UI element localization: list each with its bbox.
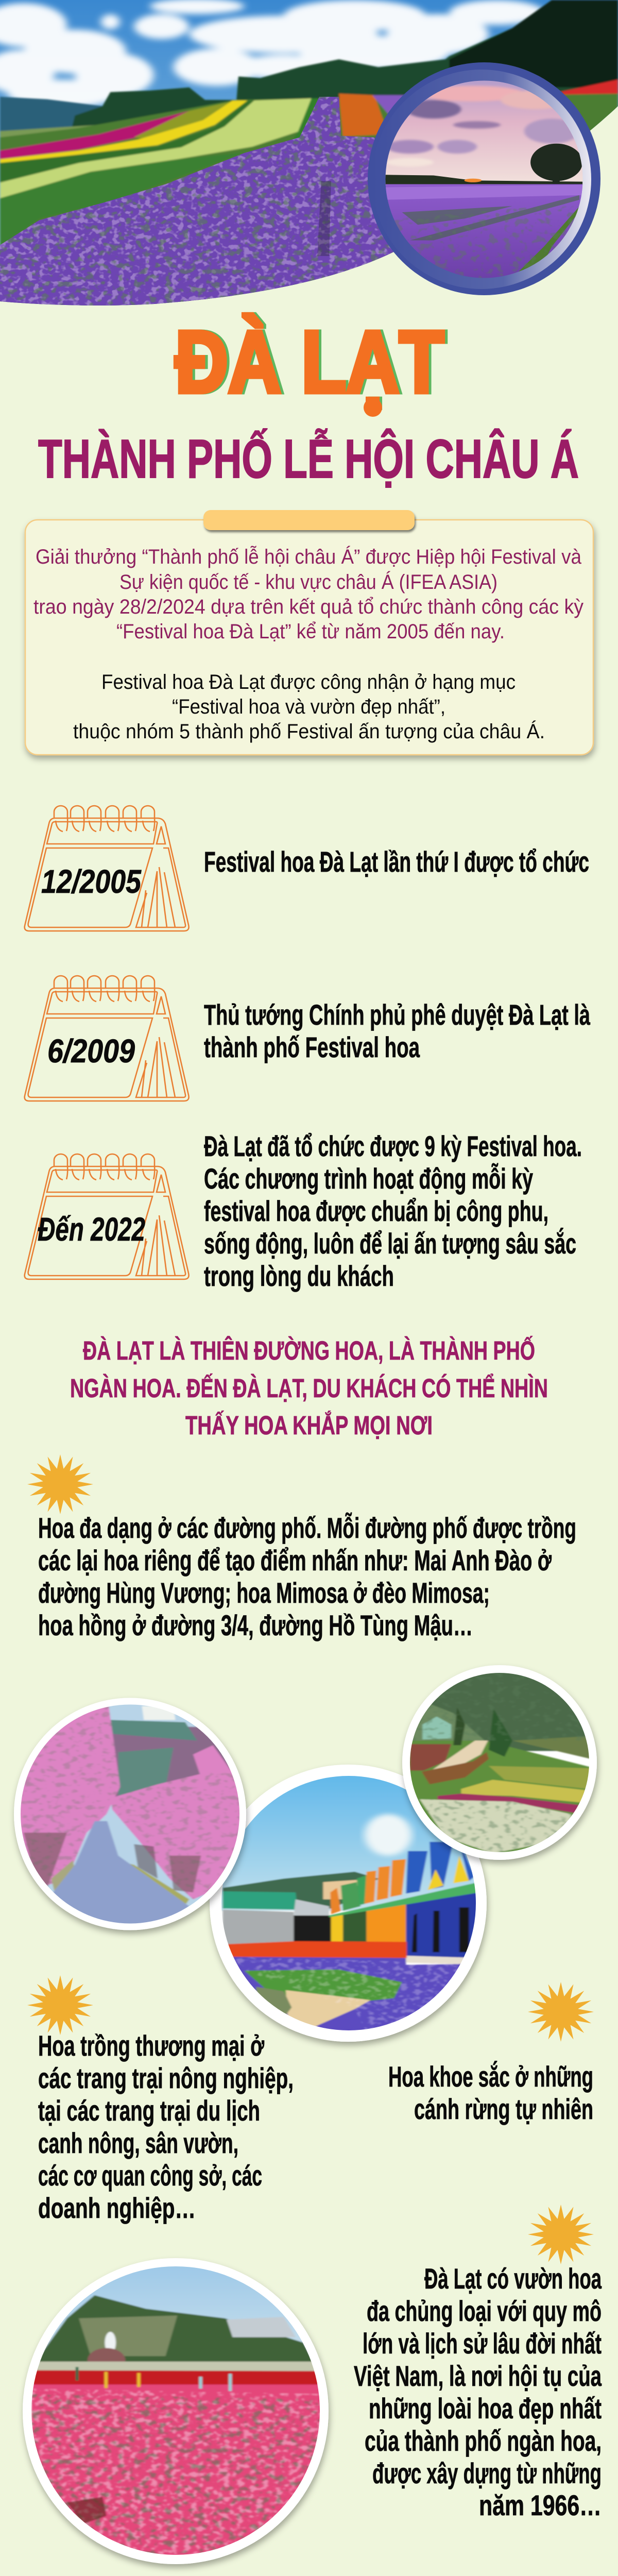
icon: star bullet, flower garden — [528, 2205, 594, 2264]
section heading: THẤY HOA KHẮP MỌI NƠI — [185, 1410, 433, 1440]
inset photo — [382, 78, 587, 281]
date: Đến 2022 — [38, 1211, 145, 1248]
text block: commercial flowers: tại các trang trại du lịch — [38, 2094, 260, 2127]
description: thành phố Festival hoa — [204, 1031, 420, 1063]
photo: colourful greenhouse and flowers — [210, 1765, 489, 2042]
recognition text: Festival hoa Đà Lạt được công nhận ở hạng mục — [101, 671, 516, 693]
text block: commercial flowers: các cơ quan công sở, các — [38, 2159, 262, 2192]
photo content — [21, 1704, 239, 1924]
text block: flower garden — [354, 2262, 602, 2521]
award text — [33, 545, 583, 643]
date: 6/2009 — [47, 1032, 135, 1070]
photo content — [24, 2261, 331, 2558]
recognition text: thuộc nhóm 5 thành phố Festival ấn tượng của châu Á. — [73, 720, 545, 743]
photo: cherry blossom road — [14, 1698, 252, 1930]
panel tab — [203, 510, 415, 530]
icon: star bullet, streets — [27, 1454, 93, 1514]
description: trong lòng du khách — [204, 1260, 394, 1292]
panel: award introduction — [25, 510, 593, 755]
timeline item: 6/2009 — [25, 976, 591, 1101]
recognition text: “Festival hoa và vườn đẹp nhất”, — [172, 696, 445, 718]
award text: trao ngày 28/2/2024 dựa trên kết quả tổ chức thành công các kỳ — [33, 596, 583, 618]
inset blue ring — [368, 62, 600, 295]
award text: Sự kiện quốc tế - khu vực châu Á (IFEA ASIA) — [119, 570, 497, 594]
award text: “Festival hoa Đà Lạt” kể từ năm 2005 đến nay. — [116, 620, 505, 643]
title: Đà Lạt: ĐÀ LẠT — [175, 313, 444, 411]
photo content — [221, 1776, 476, 2030]
photo frame — [210, 1765, 487, 2042]
photo frame — [14, 1698, 246, 1930]
photo frame — [23, 2258, 329, 2564]
text block: commercial flowers — [38, 2029, 294, 2224]
photo: pink flower garden — [23, 2258, 331, 2564]
hero circular inset: lavender field at dusk — [368, 62, 600, 295]
timeline item: Đến 2022 — [25, 1130, 582, 1292]
timeline item: 12/2005 — [25, 806, 589, 931]
text block: commercial flowers: các trang trại nông nghiệp, — [38, 2062, 294, 2094]
text block: commercial flowers: doanh nghiệp… — [38, 2192, 196, 2224]
text block: commercial flowers: Hoa trồng thương mại ở — [38, 2029, 264, 2062]
text block: flowers on streets — [38, 1512, 576, 1641]
panel box — [25, 520, 593, 755]
description — [204, 998, 591, 1063]
icon: star bullet, commercial flowers — [27, 1975, 93, 2035]
icon: star bullet, natural forest — [528, 1982, 594, 2042]
section heading — [70, 1335, 548, 1440]
photo content — [406, 1670, 595, 1856]
icon: calendar — [25, 806, 189, 931]
icon: calendar — [25, 1154, 189, 1279]
photo frame — [402, 1665, 597, 1860]
photo: flower hillside farm — [402, 1665, 597, 1860]
date: 12/2005 — [41, 863, 142, 900]
text block: commercial flowers: canh nông, sân vườn, — [38, 2127, 238, 2159]
description — [204, 1130, 582, 1292]
hero photo: flower fields — [0, 0, 618, 312]
award text: Giải thưởng “Thành phố lễ hội châu Á” được Hiệp hội Festival và — [36, 545, 582, 568]
icon: calendar — [25, 976, 189, 1101]
recognition text — [73, 671, 545, 743]
text block: natural forest flowers — [388, 2060, 593, 2125]
